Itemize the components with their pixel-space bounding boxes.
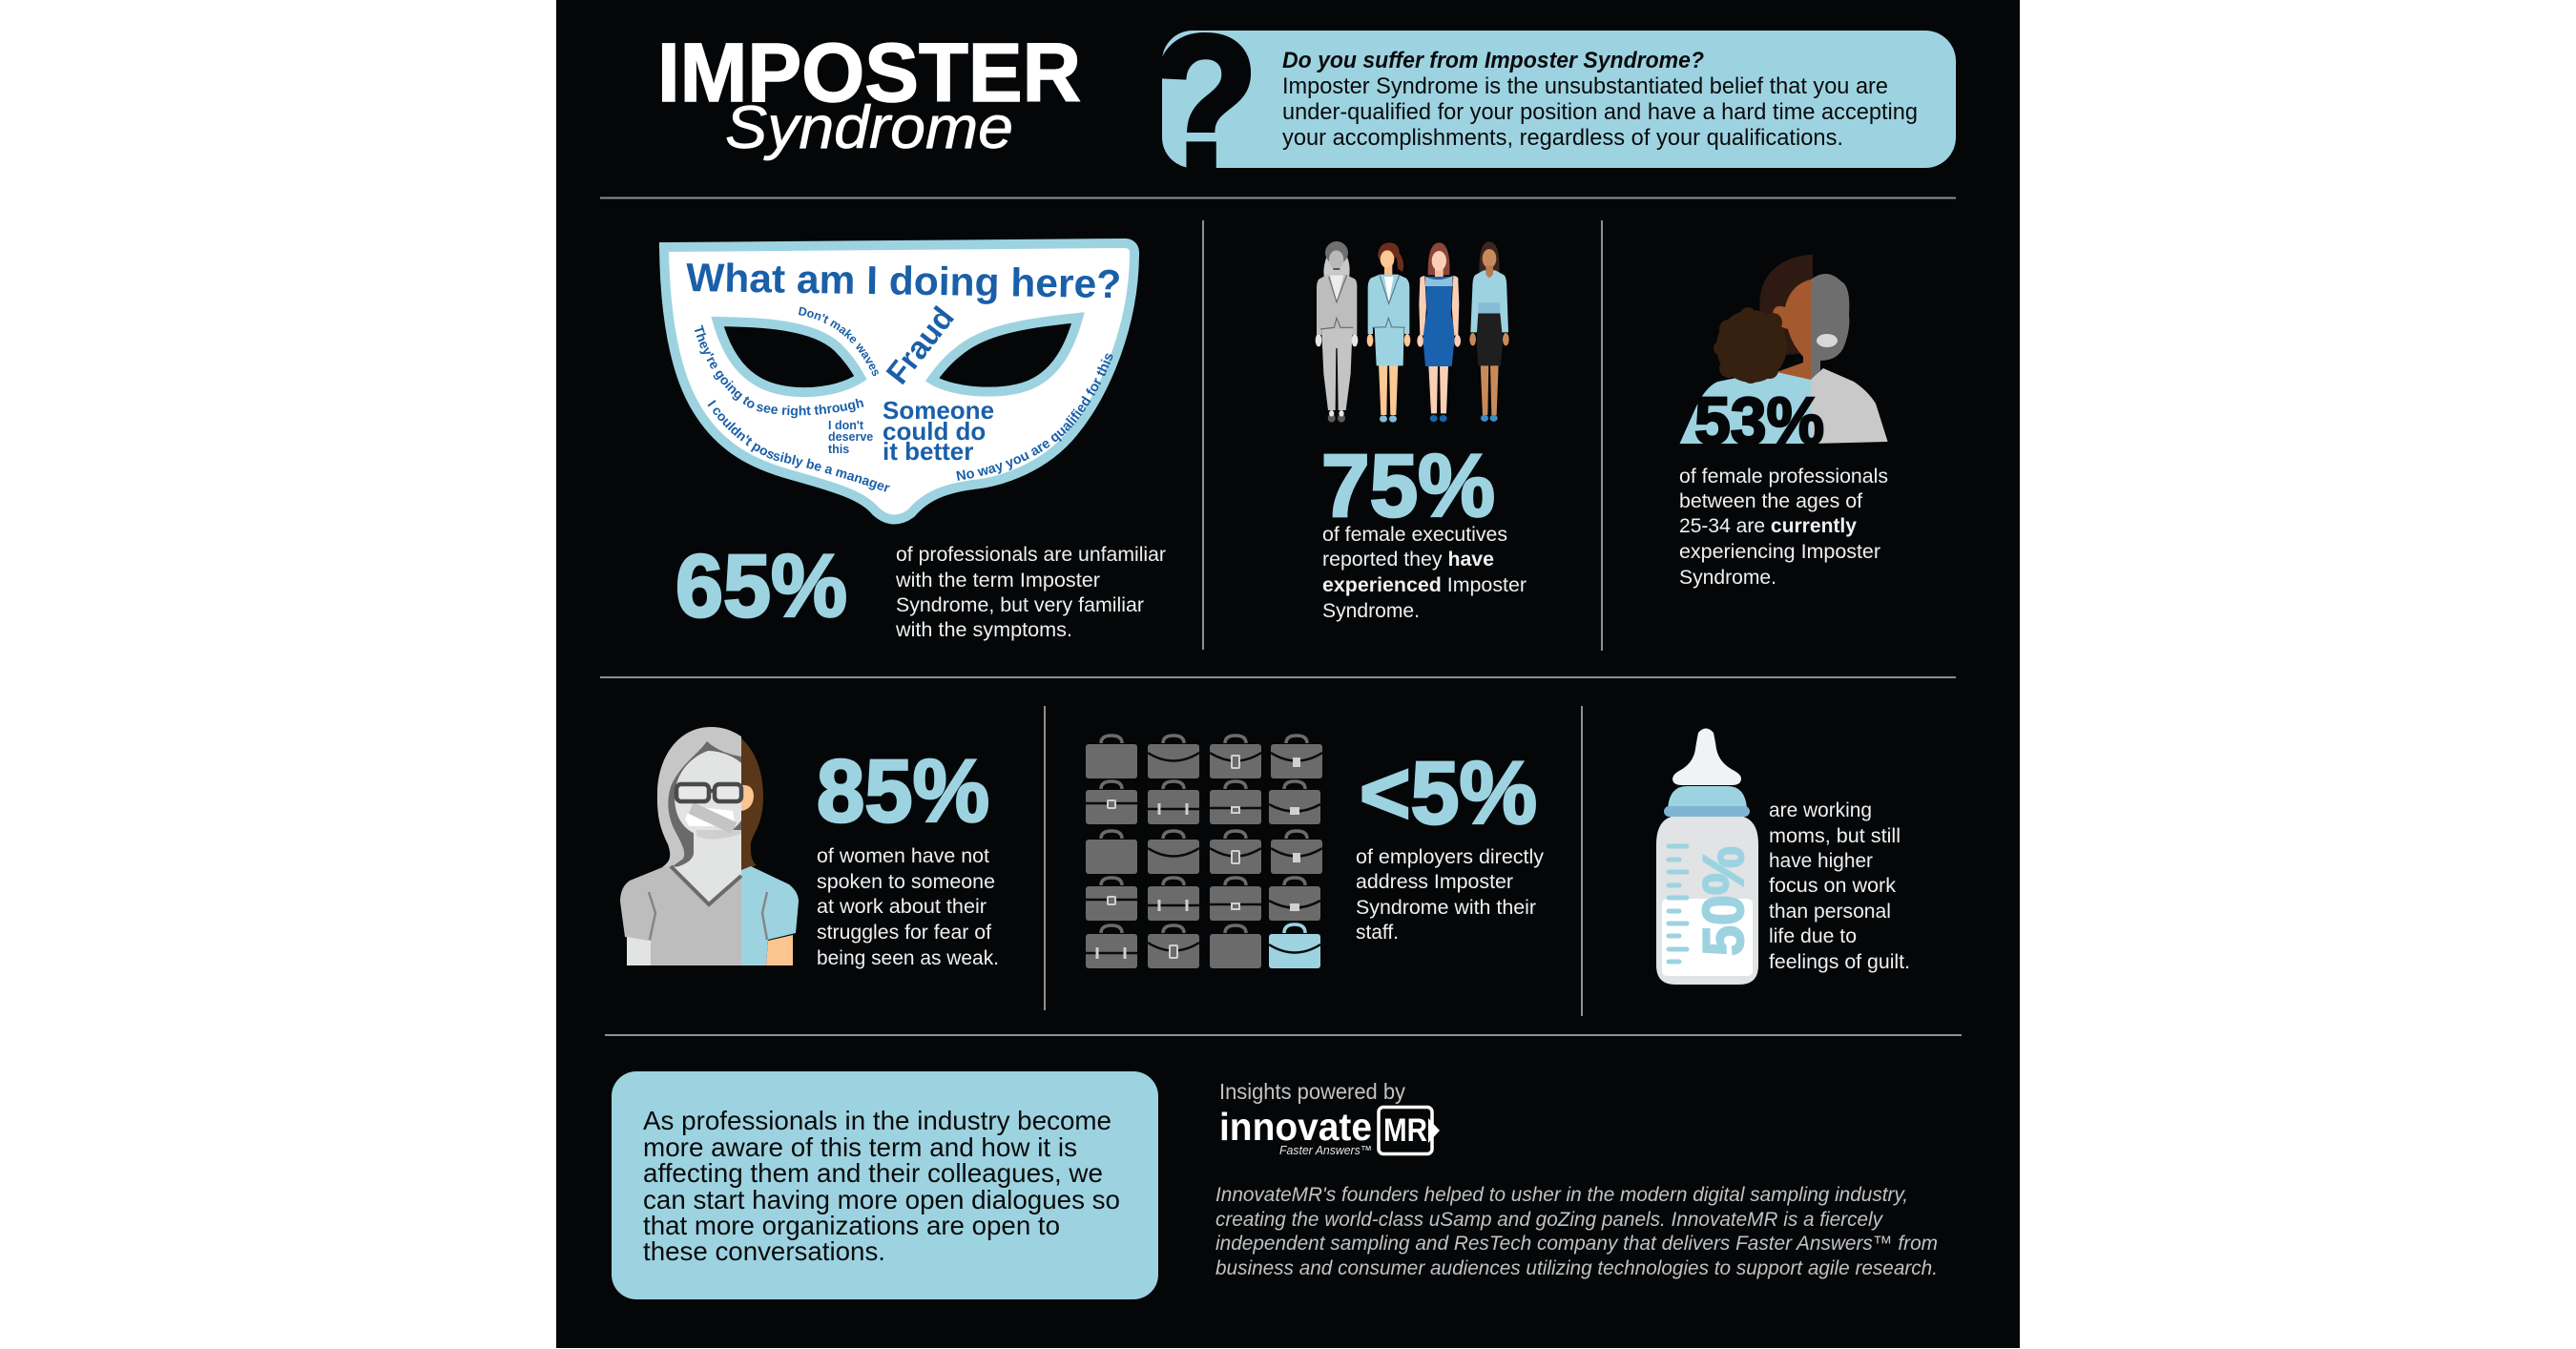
text: 50% description: moms, but still xyxy=(1769,824,1901,847)
stat: 65%: 65% xyxy=(675,536,847,635)
conclusion text: can start having more open dialogues so xyxy=(643,1185,1120,1214)
text: 50% description: focus on work xyxy=(1769,874,1896,897)
title: Syndrome xyxy=(725,94,1013,161)
icon: grid of briefcases xyxy=(1086,736,1322,968)
mask text: Someone could do it better: Someone xyxy=(883,396,994,425)
stat: 75%: 75% xyxy=(1321,436,1495,535)
title xyxy=(657,27,1081,161)
panel: 53% young professionals xyxy=(1679,255,1888,589)
icon: highlighted briefcase xyxy=(1269,924,1320,968)
stat: under 5%: <5% xyxy=(1360,743,1537,842)
mask text: Someone could do it better xyxy=(883,396,994,466)
text: 75% description: experienced Imposter xyxy=(1322,573,1527,596)
text: 53% description: of female professionals xyxy=(1679,465,1888,488)
logo: innovateMR: Faster Answers™ xyxy=(1279,1143,1372,1157)
mask text: I don't deserve this: this xyxy=(828,443,849,456)
text: 50% description xyxy=(1769,799,1910,973)
panel: sponsor xyxy=(1215,1079,1938,1279)
text: 85% description xyxy=(817,844,999,969)
text: company description: business and consumer audiences utilizing technologies to support agile research. xyxy=(1215,1257,1938,1279)
text: under 5% description: address Imposter xyxy=(1356,870,1513,893)
text: 53% description xyxy=(1679,465,1888,589)
definition text: your accomplishments, regardless of your qualifications. xyxy=(1282,125,1843,151)
icon: mask xyxy=(664,243,1134,520)
logo: innovateMR xyxy=(1219,1105,1440,1157)
text: 75% description xyxy=(1322,523,1527,622)
panel: 50% working moms xyxy=(1656,729,1910,985)
text: company description: creating the world-class uSamp and goZing panels. InnovateMR is a fiercely xyxy=(1215,1209,1883,1231)
mask text: curved phrases: Don't make waves xyxy=(799,307,879,376)
text: 53% description: between the ages of xyxy=(1679,489,1862,512)
icon: half-gray woman xyxy=(1679,255,1888,444)
logo: innovateMR: innovate xyxy=(1219,1105,1372,1149)
text: 75% description: of female executives xyxy=(1322,523,1507,546)
text: 65% description: of professionals are unfamiliar xyxy=(896,543,1166,566)
definition text xyxy=(1282,48,1918,151)
text: 85% description: spoken to someone xyxy=(817,870,995,893)
panel: conclusion xyxy=(612,1071,1158,1299)
mask text: I don't deserve this: deserve xyxy=(828,430,873,444)
mask text: I don't deserve this xyxy=(828,419,873,456)
text: under 5% description: staff. xyxy=(1356,921,1399,944)
stat: 85%: 85% xyxy=(817,741,989,841)
conclusion text: that more organizations are open to xyxy=(643,1211,1060,1240)
icon: woman with taped mouth xyxy=(620,727,799,965)
mask text: Someone could do it better: it better xyxy=(883,437,973,466)
text: company description xyxy=(1215,1184,1938,1279)
stat: 50%: 50% xyxy=(1692,846,1755,956)
text: 65% description: with the symptoms. xyxy=(895,618,1072,641)
mask text: curved phrases: No way you are qualified for this xyxy=(956,353,1112,481)
figure: light blue suit xyxy=(1367,242,1410,423)
logo: innovateMR: MR xyxy=(1383,1112,1427,1149)
mask text: curved phrases: I couldn't possibly be a manager xyxy=(708,400,890,492)
text: 53% description: 25-34 are currently xyxy=(1679,514,1857,537)
mask text: Fraud: Fraud xyxy=(879,300,961,390)
figure: blue dress xyxy=(1417,242,1461,422)
title: IMPOSTER xyxy=(657,27,1081,119)
text: 53% description: experiencing Imposter xyxy=(1679,540,1880,563)
text: 85% description: being seen as weak. xyxy=(817,946,999,969)
text: 53% description: Syndrome. xyxy=(1679,566,1776,589)
mask text: What am I doing here: What am I doing here? xyxy=(686,255,1122,306)
conclusion text: As professionals in the industry become xyxy=(643,1106,1111,1135)
text: 75% description: Syndrome. xyxy=(1322,599,1420,622)
mask text: I don't deserve this: I don't xyxy=(828,419,864,432)
text: 85% description: of women have not xyxy=(817,844,989,867)
conclusion text: more aware of this term and how it is xyxy=(643,1132,1077,1162)
definition text: under-qualified for your position and have a hard time accepting xyxy=(1282,99,1918,125)
text: 65% description xyxy=(895,543,1166,641)
text: 85% description: at work about their xyxy=(817,895,987,918)
black poster background xyxy=(556,0,2020,1348)
text: 65% description: Syndrome, but very familiar xyxy=(896,593,1144,616)
text: 50% description: life due to xyxy=(1769,924,1857,947)
definition text: Imposter Syndrome is the unsubstantiated belief that you are xyxy=(1282,73,1888,99)
panel: under 5% employers xyxy=(1086,736,1544,968)
figure: blue shirt black skirt xyxy=(1469,241,1509,422)
icon: question mark: ? xyxy=(1152,0,1258,211)
icon: four women xyxy=(1316,241,1509,423)
text: company description: InnovateMR's founders helped to usher in the modern digital sampling industry, xyxy=(1215,1184,1908,1206)
text: 75% description: reported they have xyxy=(1322,548,1494,571)
conclusion background xyxy=(612,1071,1158,1299)
mask text: Someone could do it better: could do xyxy=(883,417,986,446)
panel: 75% executives xyxy=(1316,241,1527,622)
conclusion text xyxy=(643,1106,1120,1266)
panel: definition xyxy=(1152,0,1956,211)
text: insights powered by: Insights powered by xyxy=(1219,1079,1405,1104)
text: 50% description: feelings of guilt. xyxy=(1769,950,1910,973)
text: 65% description: with the term Imposter xyxy=(895,569,1100,591)
definition text: Do you suffer from Imposter Syndrome? xyxy=(1282,48,1704,73)
mask text: curved phrases: They're going to see right through xyxy=(695,324,864,418)
definition background xyxy=(1162,31,1956,168)
text: 50% description: have higher xyxy=(1769,849,1873,872)
text: 50% description: than personal xyxy=(1769,900,1891,923)
text: under 5% description xyxy=(1356,845,1544,944)
panel: 85% silenced woman xyxy=(620,727,999,969)
text: under 5% description: of employers directly xyxy=(1356,845,1544,868)
mask text: curved phrases xyxy=(695,307,1112,492)
stat: 53%: 53% xyxy=(1694,384,1824,458)
text: company description: independent sampling and ResTech company that delivers Faster Answers™ from xyxy=(1215,1233,1938,1255)
conclusion text: these conversations. xyxy=(643,1236,885,1266)
icon: baby bottle xyxy=(1656,729,1758,985)
text: under 5% description: Syndrome with their xyxy=(1356,896,1536,919)
conclusion text: affecting them and their colleagues, we xyxy=(643,1158,1103,1188)
panel: 65% mask xyxy=(658,239,1166,641)
figure: gray suit xyxy=(1316,241,1358,423)
text: 50% description: are working xyxy=(1769,799,1872,821)
text: 85% description: struggles for fear of xyxy=(817,921,991,944)
